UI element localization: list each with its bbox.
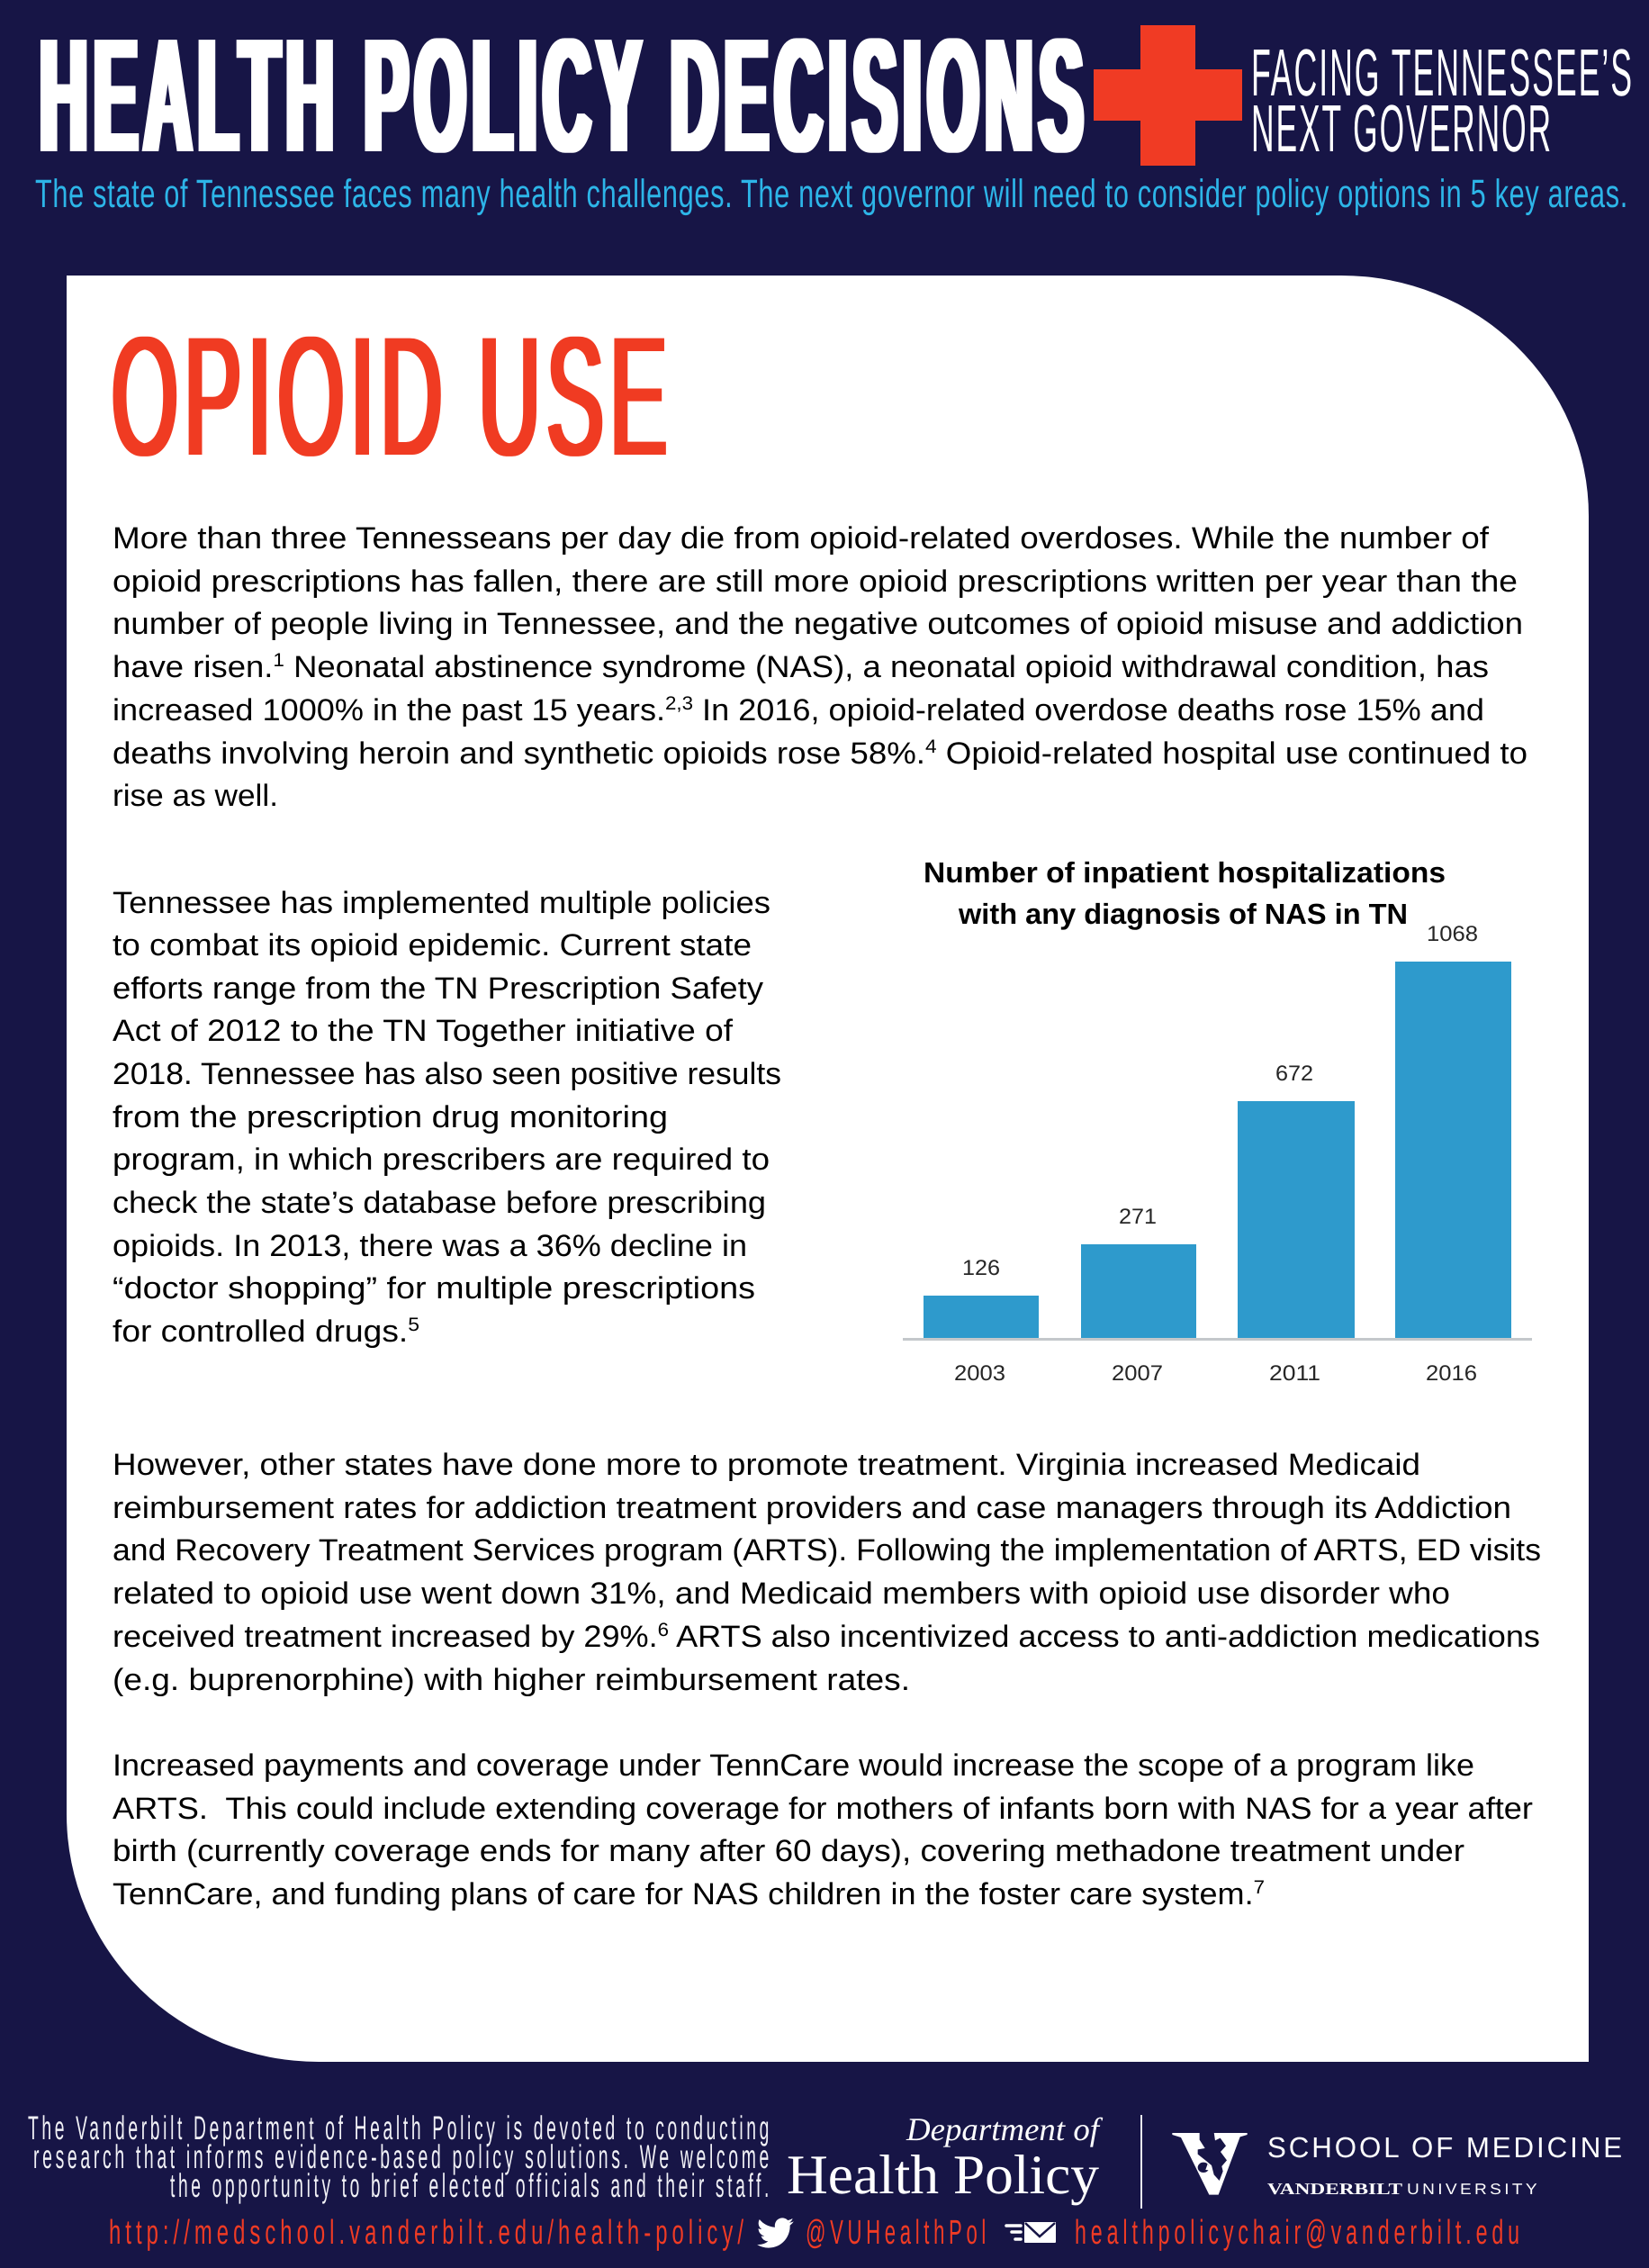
text block: intro paragraph: have risen. (113, 650, 262, 684)
text block: Tennessee policies (113, 886, 781, 1349)
panel: opioid use (67, 276, 1589, 2062)
text block: intro paragraph: 1 (273, 650, 284, 671)
text block: intro paragraph: opioid prescriptions has fallen, there are still more opioid prescriptions written per year than the (113, 565, 1518, 599)
value labels: 271 (1119, 1205, 1157, 1229)
value labels: 1068 (1427, 922, 1478, 946)
text block: other states (113, 1448, 1541, 1697)
logo: Vanderbilt School of Medicine (1172, 2131, 1625, 2198)
text block: other states: 6 (658, 1620, 669, 1640)
year labels: 2011 (1269, 1361, 1320, 1386)
text block: Tennessee policies: for controlled drugs. (113, 1315, 383, 1349)
value labels (962, 922, 1478, 1280)
icon: twitter (757, 2218, 794, 2248)
link: twitter handle: @VUHealthPol (806, 2214, 990, 2252)
text block: Tennessee policies: Act of 2012 to the TN Together initiative of (113, 1014, 734, 1048)
text block: other states: and Recovery Treatment Services program (ARTS). Following the implementation of ARTS, ED visits (113, 1533, 1541, 1568)
text block: Tennessee policies: to combat its opioid epidemic. Current state (113, 928, 752, 962)
text block: Tennessee policies: efforts range from the TN Prescription Safety (113, 971, 763, 1006)
text block: intro paragraph: deaths involving heroin and synthetic opioids rose 58%. (113, 736, 866, 771)
bar chart: NAS hospitalizations (903, 856, 1532, 1386)
text block: intro paragraph (113, 521, 1527, 813)
text block: other states: reimbursement rates for addiction treatment providers and case managers through its Addiction (113, 1491, 1511, 1525)
logo: Department of Health Policy: Health Policy (787, 2145, 1099, 2206)
text block: intro paragraph: increased 1000% in the past 15 years. (113, 693, 633, 727)
heading: opioid use: OPIOID USE (112, 302, 673, 491)
logo: Vanderbilt School of Medicine: VANDERBILT (1267, 2180, 1402, 2198)
text block: department description (28, 2110, 772, 2204)
text block: intro paragraph: More than three Tennesseans per day die from opioid-related overdoses. While the number of (113, 521, 1490, 556)
year labels (954, 1361, 1477, 1386)
chart title: Number of inpatient hospitalizations (924, 856, 1446, 889)
text block: Tennessee policies: from the prescription drug monitoring (113, 1100, 668, 1134)
text block: Tennessee policies: 5 (408, 1315, 419, 1335)
text block: TennCare (113, 1748, 1533, 1911)
text block: TennCare: TennCare, and funding plans of care for NAS children in the foster care system. (113, 1877, 1187, 1911)
year labels: 2003 (954, 1361, 1005, 1386)
year labels: 2016 (1426, 1361, 1477, 1386)
text block: other states: (e.g. buprenorphine) with higher reimbursement rates. (113, 1663, 910, 1697)
icon: email (1006, 2222, 1056, 2243)
chart title (924, 856, 1446, 930)
link: website: http://medschool.vanderbilt.edu/health-policy/ (109, 2214, 748, 2252)
header tagline (1251, 35, 1634, 166)
text block: other states: received treatment increased by 29%. (113, 1620, 626, 1654)
value labels: 672 (1275, 1062, 1313, 1086)
header (35, 5, 1634, 216)
text block: TennCare: Increased payments and coverage under TennCare would increase the scope of a program like (113, 1748, 1474, 1783)
text block: Tennessee policies: Tennessee has implemented multiple policies (113, 886, 770, 920)
bars (924, 962, 1511, 1338)
logo: Vanderbilt School of Medicine: UNIVERSITY (1407, 2181, 1540, 2198)
value labels: 126 (962, 1256, 1000, 1280)
footer (28, 2110, 1625, 2252)
text block: TennCare: ARTS. This could include extending coverage for mothers of infants born with NAS for a year after (113, 1792, 1533, 1826)
logo: Vanderbilt School of Medicine: SCHOOL OF MEDICINE (1267, 2131, 1625, 2164)
text block: intro paragraph: In 2016, opioid-related overdose deaths rose 15% and (693, 693, 1484, 727)
text block: Tennessee policies: “doctor shopping” for multiple prescriptions (113, 1271, 755, 1306)
text block: department description: research that informs evidence-based policy solutions. We welcome (33, 2138, 772, 2175)
text block: Tennessee policies: check the state’s database before prescribing (113, 1186, 766, 1220)
icon: red cross (1094, 25, 1242, 166)
logo: Department of Health Policy (787, 2111, 1104, 2206)
chart title: with any diagnosis of NAS in TN (958, 898, 1408, 930)
text block: Tennessee policies: opioids. In 2013, there was a 36% decline in (113, 1229, 747, 1263)
text block: TennCare: birth (currently coverage ends for many after 60 days), covering methadone treatment under (113, 1834, 1464, 1868)
text block: department description: The Vanderbilt Department of Health Policy is devoted to conducting (28, 2110, 772, 2146)
year labels: 2007 (1112, 1361, 1163, 1386)
logo: Department of Health Policy: Department of (906, 2111, 1104, 2147)
text block: Tennessee policies: 2018. Tennessee has also seen positive results (113, 1057, 781, 1091)
text block: TennCare: 7 (1254, 1877, 1265, 1898)
text block: department description: the opportunity to brief elected officials and their staff. (170, 2167, 772, 2204)
text block: intro paragraph: number of people living in Tennessee, and the negative outcomes of opioid misuse and addiction (113, 607, 1523, 641)
icon: Vanderbilt V with oak leaf (1172, 2132, 1248, 2195)
text block: other states: However, other states have done more to promote treatment. Virginia increased Medicaid (113, 1448, 1420, 1482)
text block: other states: related to opioid use went down 31%, and Medicaid members with opioid use disorder who (113, 1577, 1450, 1611)
text block: intro paragraph: Opioid-related hospital use continued to (937, 736, 1527, 771)
text block: Tennessee policies: program, in which prescribers are required to (113, 1143, 770, 1177)
text block: intro paragraph: rise as well. (113, 779, 278, 813)
text block: other states: ARTS also incentivized access to anti-addiction medications (669, 1620, 1540, 1654)
text block: intro paragraph: 2,3 (665, 693, 693, 714)
text block: intro paragraph: 4 (925, 736, 937, 757)
text block: intro paragraph: Neonatal abstinence syndrome (NAS), a neonatal opioid withdrawal condition, has (284, 650, 1489, 684)
